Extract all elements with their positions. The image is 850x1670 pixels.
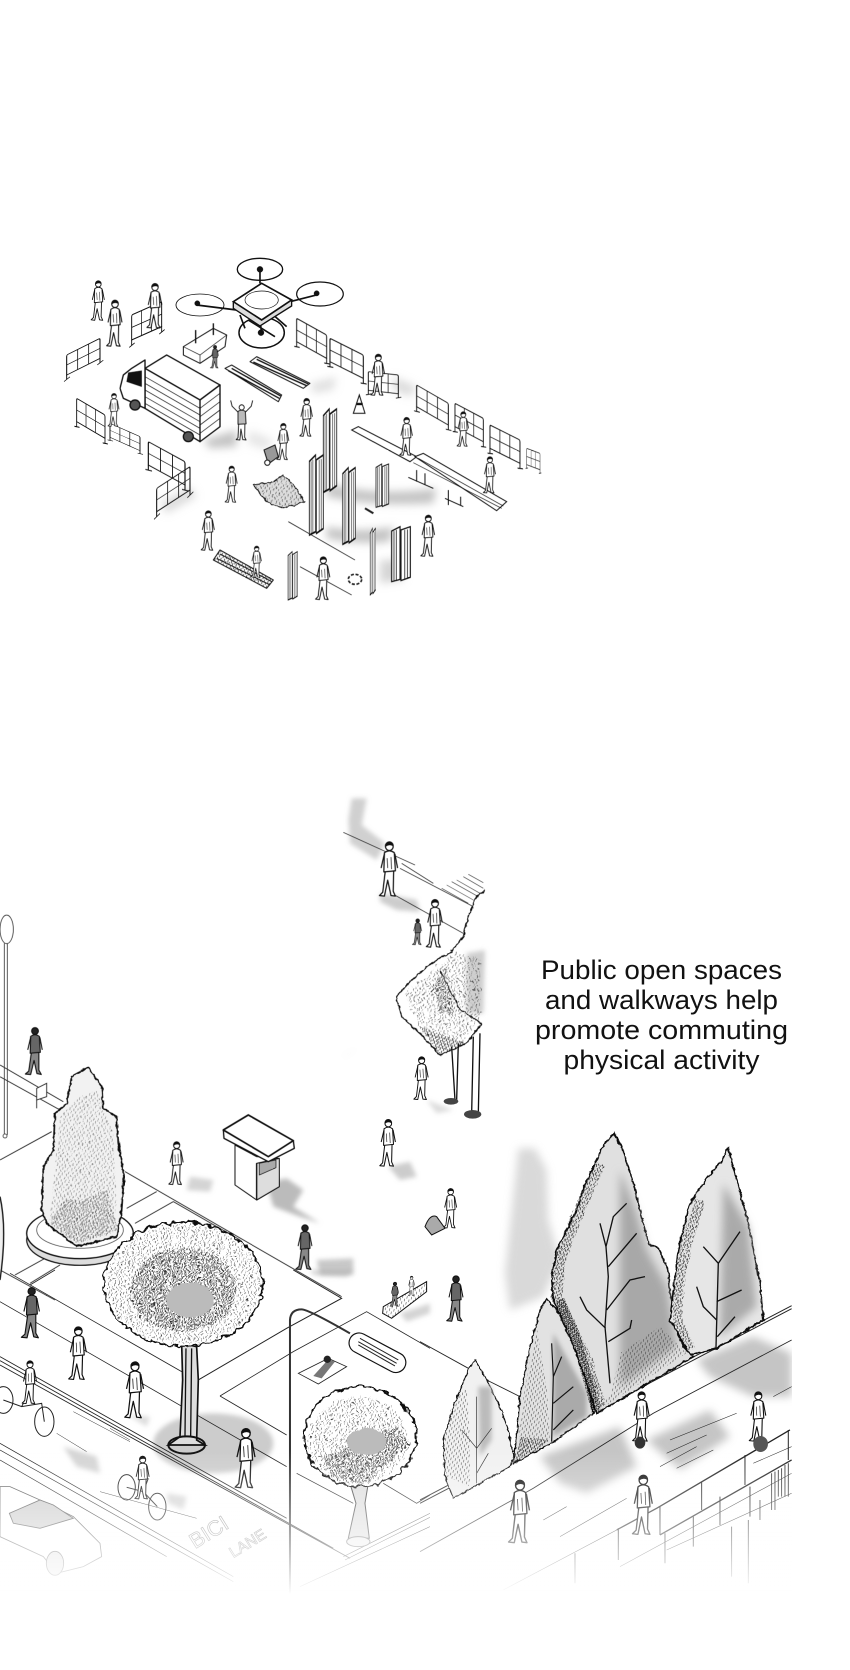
vertical steel columns <box>288 409 410 600</box>
conifer four <box>443 1360 513 1498</box>
big round tree <box>104 1222 263 1454</box>
walkway shadows <box>343 798 453 1113</box>
pedestrians on upper walkway <box>379 842 442 1100</box>
generator box and materials <box>183 323 310 588</box>
street pedestrians <box>21 1288 255 1488</box>
caption: physical activity <box>564 1045 760 1075</box>
gravel mound <box>253 475 305 508</box>
conifer three <box>513 1298 593 1463</box>
ground shadows on site <box>160 377 437 583</box>
illustration: plaza with fountain and kiosk <box>0 915 417 1300</box>
traffic cone <box>353 395 365 413</box>
plaza pedestrians <box>25 1028 395 1270</box>
illustration: construction site <box>64 258 541 600</box>
street shadows <box>63 1270 430 1510</box>
caption: and walkways help <box>545 985 778 1015</box>
road marking text: BICI <box>185 1511 233 1554</box>
lamp with arm <box>290 1309 409 1593</box>
road marking text <box>185 1511 269 1562</box>
lower white area <box>0 1594 850 1670</box>
tree shadow wash on ground <box>505 1148 560 1310</box>
cyclist one <box>0 1361 54 1436</box>
bench with people <box>383 1276 427 1318</box>
icon: truck <box>120 355 220 442</box>
riders on path <box>509 1392 768 1543</box>
barriers <box>64 300 541 519</box>
wheelbarrow <box>264 445 278 465</box>
bottom fade <box>0 1450 850 1595</box>
dark-clad pedestrian <box>447 1276 463 1321</box>
illustration: street level with trees and cyclists <box>0 1222 430 1593</box>
car <box>0 1487 102 1575</box>
person on mat <box>298 1356 347 1384</box>
sign post <box>37 1083 47 1108</box>
round tree <box>304 1387 416 1547</box>
path shadows <box>540 1337 792 1493</box>
caption <box>535 955 788 1075</box>
road marking text: LANE <box>226 1526 269 1562</box>
construction lines and debris <box>288 508 373 595</box>
caption: Public open spaces <box>541 955 782 985</box>
lamp post <box>0 915 13 1138</box>
plaza shadows <box>187 1162 417 1275</box>
walkway lines <box>343 832 483 933</box>
icon: drone <box>176 258 343 348</box>
path and railing lines <box>420 1306 792 1590</box>
fountain <box>27 1068 133 1265</box>
tree edge at left <box>0 1197 4 1280</box>
conifer two <box>670 1148 763 1355</box>
workers <box>91 281 495 600</box>
right edge clip <box>792 1200 850 1600</box>
kiosk <box>223 1115 294 1200</box>
caption: promote commuting <box>535 1015 788 1045</box>
illustration: conifers and elevated path <box>420 1133 792 1590</box>
cyclist two <box>118 1456 166 1520</box>
illustration: upper walkway with tree and pedestrians <box>343 798 485 1119</box>
street lines <box>0 1270 430 1587</box>
tree: clipped crown <box>397 890 485 1119</box>
plaza lines <box>0 1065 342 1300</box>
pedestrian with stroller <box>425 1189 457 1235</box>
steel beams <box>352 427 507 511</box>
conifer one <box>552 1133 693 1413</box>
